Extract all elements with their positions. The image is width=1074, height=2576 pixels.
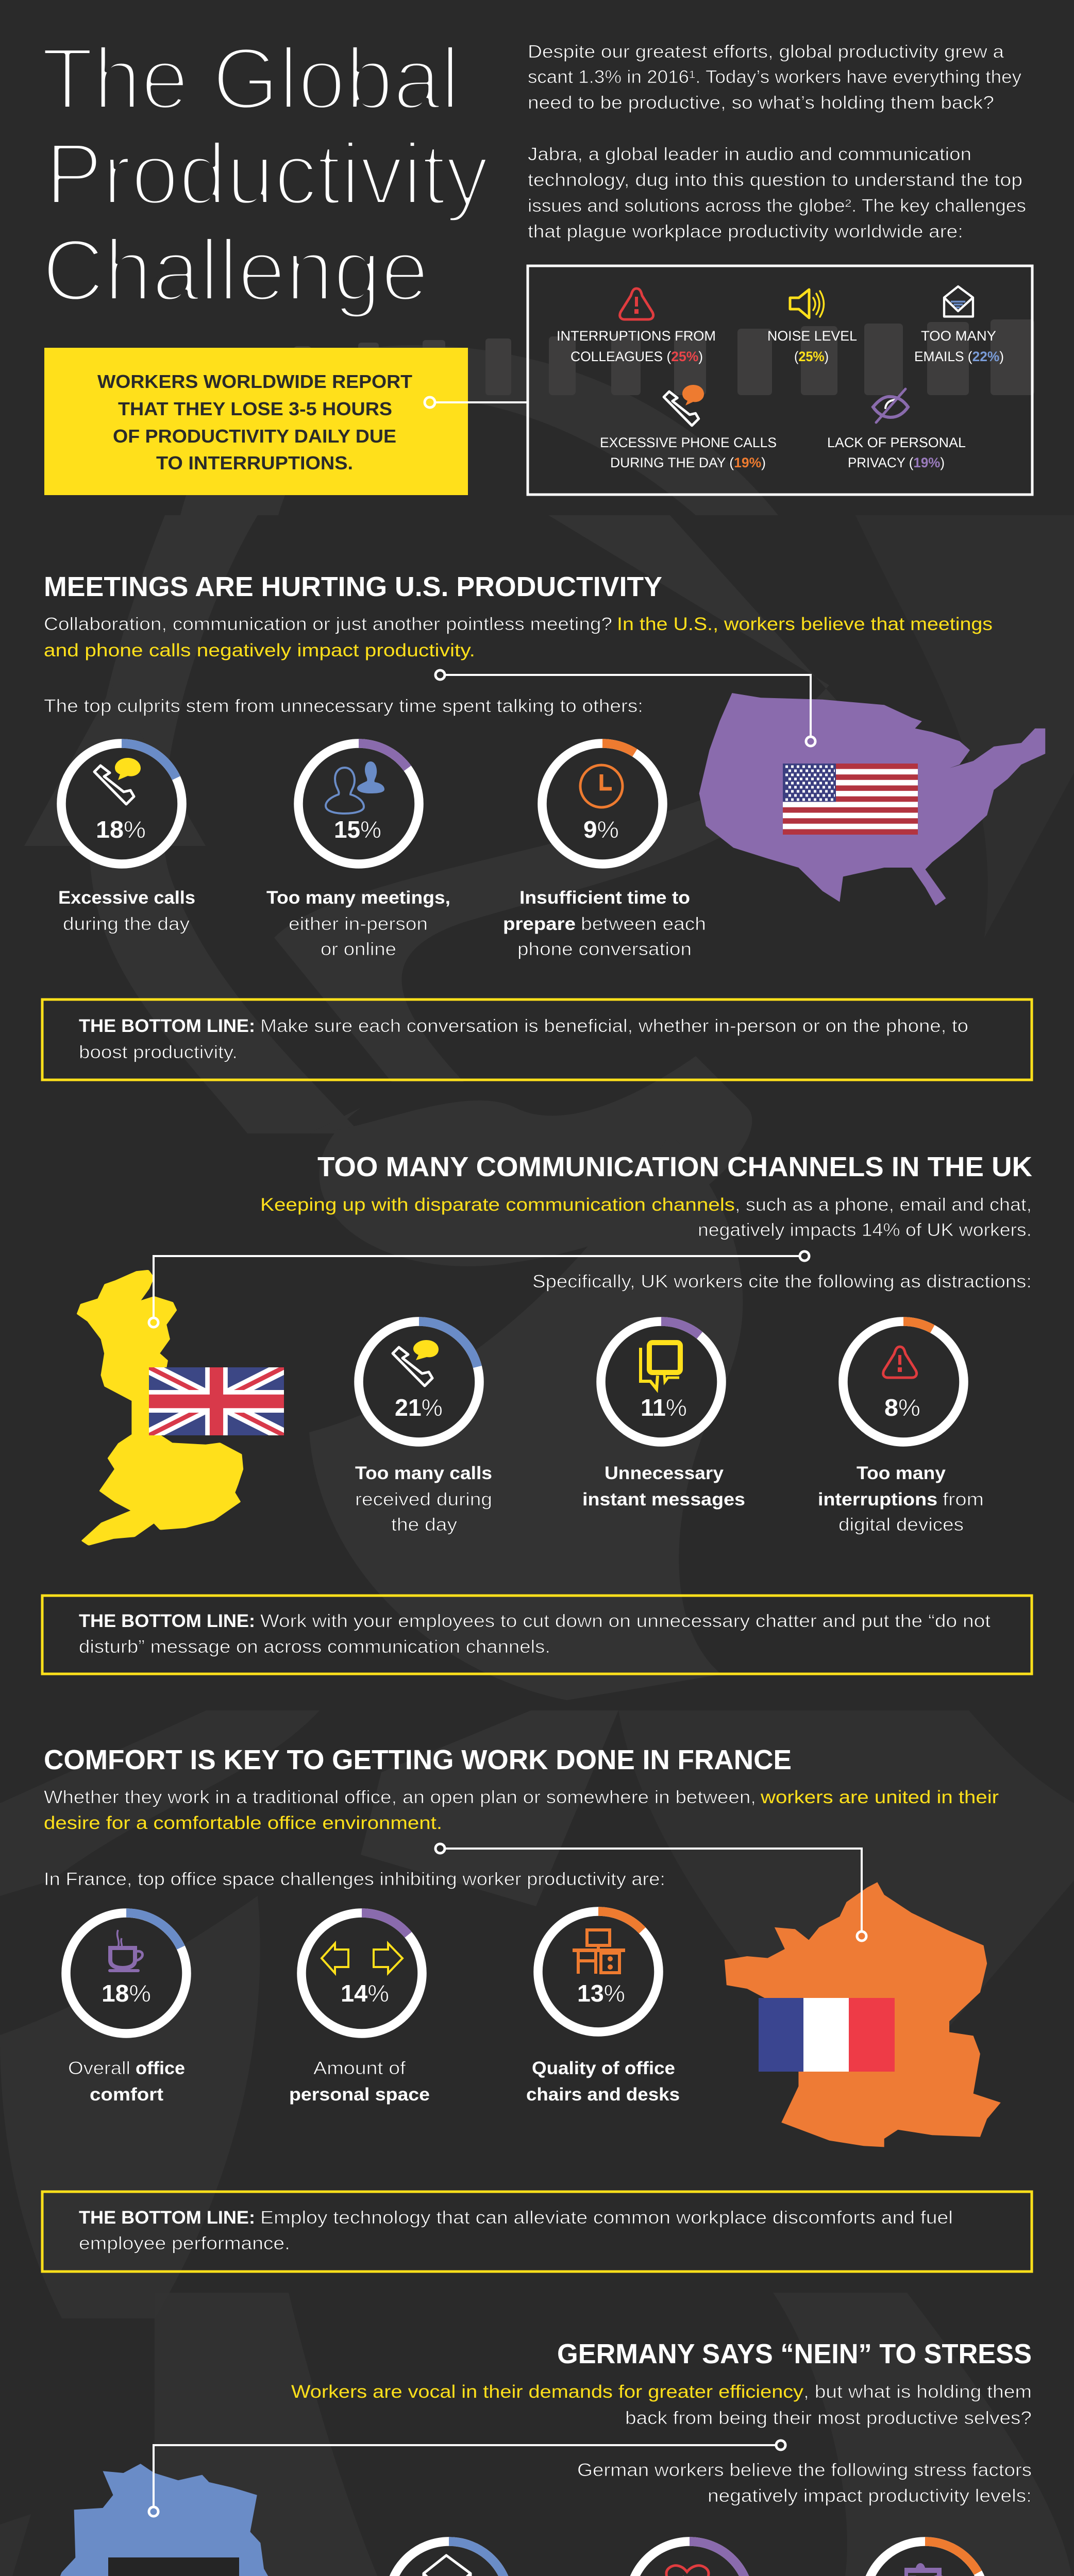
ring: insufficient time 9%: 9% bbox=[583, 816, 619, 843]
ring: excessive calls 18% bbox=[61, 743, 182, 864]
label: Too many bbox=[857, 1463, 946, 1483]
icon: people bbox=[326, 761, 384, 814]
icon: speaker bbox=[790, 290, 824, 318]
label: instant messages bbox=[582, 1489, 745, 1510]
label: digital devices bbox=[838, 1515, 964, 1535]
label: Unnecessary bbox=[605, 1463, 724, 1483]
intro text bbox=[44, 614, 993, 716]
intro text: In France, top office space challenges inhibiting worker productivity are: bbox=[44, 1869, 665, 1889]
intro text: Specifically, UK workers cite the following as distractions: bbox=[532, 1272, 1032, 1292]
callout: bottom line: Make sure each conversation is beneficial, whether in-person or on the phone, to bbox=[260, 1016, 968, 1036]
flag: UK bbox=[149, 1367, 284, 1435]
label: phone calls bbox=[600, 435, 777, 470]
map: UK bbox=[79, 1271, 241, 1544]
callout: bottom line: Employ technology that can alleviate common workplace discomforts and fuel bbox=[260, 2208, 953, 2228]
label: privacy: PRIVACY (19%) bbox=[848, 455, 945, 470]
callout: bottom line: disturb” message on across communication channels. bbox=[79, 1637, 550, 1657]
callout: lost hours: THAT THEY LOSE 3-5 HOURS bbox=[118, 398, 392, 419]
ring: personal space 14% bbox=[301, 1913, 422, 2033]
icon: eye slash bbox=[873, 389, 908, 422]
ring: chairs and desks 13%: 13% bbox=[577, 1980, 625, 2007]
label: privacy: LACK OF PERSONAL bbox=[827, 435, 966, 450]
intro text: Despite our greatest efforts, global productivity grew a bbox=[528, 42, 1004, 62]
label: Insufficient time to bbox=[519, 888, 690, 908]
connector: text to UK map bbox=[149, 1251, 809, 1327]
icon: email bbox=[424, 2555, 471, 2576]
section: France bbox=[42, 1744, 1032, 2272]
intro text: scant 1.3% in 2016¹. Today’s workers have everything they bbox=[528, 67, 1022, 87]
label: or online bbox=[321, 939, 396, 959]
intro text: that plague workplace productivity worldwide are: bbox=[528, 222, 963, 242]
icon: alert triangle bbox=[620, 289, 653, 319]
label bbox=[355, 1463, 492, 1535]
ring: excessive calls 18%: 18% bbox=[96, 816, 146, 843]
intro text: Whether they work in a traditional office, an open plan or somewhere in between, bbox=[44, 1787, 756, 1807]
label: noise: (25%) bbox=[794, 349, 829, 364]
intro text bbox=[44, 1787, 999, 1889]
connector: text to France map bbox=[435, 1844, 866, 1941]
intro text: issues and solutions across the globe². The key challenges bbox=[528, 196, 1026, 216]
label: Too many meetings, bbox=[266, 888, 450, 908]
label: interruptions: COLLEAGUES (25%) bbox=[570, 349, 703, 364]
ring: instant messages 11%: 11% bbox=[641, 1394, 687, 1421]
intro text: German workers believe the following stress factors bbox=[577, 2460, 1032, 2480]
ring: interruptions 8%: 8% bbox=[884, 1394, 920, 1421]
callout: bottom line: boost productivity. bbox=[79, 1042, 238, 1062]
label: emails: EMAILS (22%) bbox=[914, 349, 1004, 364]
icon: heart pulse bbox=[666, 2566, 709, 2576]
intro text bbox=[528, 42, 1026, 242]
flag: France bbox=[759, 1998, 895, 2072]
intro text: , but what is holding them bbox=[803, 2382, 1032, 2402]
callout: lost hours: TO INTERRUPTIONS. bbox=[156, 452, 353, 473]
label: Overall bbox=[68, 2058, 130, 2078]
icon: message bubbles bbox=[641, 1343, 680, 1389]
ring: flood of emails 26% bbox=[389, 2541, 509, 2576]
intro text: negatively impact productivity levels: bbox=[708, 2486, 1032, 2506]
label: Too many calls bbox=[355, 1463, 492, 1483]
ring: insufficient time 9% bbox=[542, 743, 663, 864]
callout: bottom line bbox=[42, 2192, 1032, 2272]
ring: too many meetings 15% bbox=[298, 743, 419, 864]
heading: TOO MANY COMMUNICATION CHANNELS IN THE UK bbox=[317, 1151, 1032, 1182]
label: interruptions: INTERRUPTIONS FROM bbox=[557, 328, 716, 344]
heading: GERMANY SAYS “NEIN” TO STRESS bbox=[557, 2338, 1032, 2369]
title bbox=[41, 30, 489, 319]
label: either in-person bbox=[289, 914, 428, 934]
label: from bbox=[943, 1489, 984, 1510]
icon: alert triangle bbox=[883, 1347, 917, 1378]
ring: quantitative goals 25% bbox=[629, 2541, 750, 2576]
map: Germany bbox=[54, 2464, 280, 2576]
label: privacy bbox=[827, 435, 966, 470]
label: interruptions bbox=[818, 1489, 937, 1510]
flag: USA bbox=[783, 764, 918, 835]
connector: text to USA map bbox=[435, 670, 815, 746]
label: emails bbox=[914, 328, 1004, 364]
label bbox=[818, 1463, 984, 1535]
label bbox=[582, 1463, 745, 1510]
intro text: back from being their most productive selves? bbox=[625, 2408, 1032, 2428]
callout: bottom line: employee performance. bbox=[79, 2233, 290, 2253]
flag: Germany bbox=[108, 2557, 239, 2576]
intro text: technology, dug into this question to understand the top bbox=[528, 170, 1022, 190]
label: during the day bbox=[63, 914, 190, 934]
ring: interruptions 8% bbox=[843, 1321, 964, 1442]
intro text: , such as a phone, email and chat, bbox=[735, 1195, 1032, 1215]
intro text: and phone calls negatively impact productivity. bbox=[44, 640, 475, 660]
icon: email bbox=[944, 286, 973, 316]
title: The Global bbox=[41, 30, 460, 128]
label bbox=[289, 2058, 430, 2105]
connector: text to Germany map bbox=[149, 2441, 785, 2516]
label: phone calls: EXCESSIVE PHONE CALLS bbox=[600, 435, 777, 450]
label: Amount of bbox=[313, 2058, 406, 2078]
title: Challenge bbox=[42, 222, 429, 319]
intro text: need to be productive, so what’s holding them back? bbox=[528, 93, 994, 113]
intro text: negatively impacts 14% of UK workers. bbox=[698, 1220, 1032, 1240]
label bbox=[266, 888, 450, 959]
icon: clipboard bbox=[904, 2563, 947, 2576]
label: phone calls: DURING THE DAY (19%) bbox=[610, 455, 766, 470]
callout: lost hours bbox=[44, 348, 468, 495]
intro text: desire for a comfortable office environment. bbox=[44, 1813, 442, 1833]
faint rising bars bbox=[294, 319, 1034, 395]
label bbox=[68, 2058, 185, 2105]
intro text: Keeping up with disparate communication channels bbox=[260, 1195, 735, 1215]
label: noise: NOISE LEVEL bbox=[767, 328, 857, 344]
label: emails: TOO MANY bbox=[921, 328, 996, 344]
ring: office comfort 18%: 18% bbox=[102, 1980, 151, 2007]
icon: phone with bubble bbox=[664, 385, 704, 426]
intro text: workers are united in their bbox=[760, 1787, 999, 1807]
heading: MEETINGS ARE HURTING U.S. PRODUCTIVITY bbox=[44, 571, 662, 602]
section: United Kingdom bbox=[42, 1151, 1032, 1674]
callout: bottom line: THE BOTTOM LINE: bbox=[79, 1016, 255, 1036]
label: Quality of office bbox=[532, 2058, 675, 2078]
section: Germany bbox=[42, 2338, 1032, 2576]
title: Productivity bbox=[45, 125, 489, 223]
label: between each bbox=[581, 914, 706, 934]
icon: desk bbox=[573, 1930, 625, 1974]
intro text: The top culprits stem from unnecessary time spent talking to others: bbox=[44, 696, 643, 716]
ring: too many meetings 15%: 15% bbox=[334, 816, 381, 843]
intro text: Jabra, a global leader in audio and communication bbox=[528, 144, 971, 164]
icon: phone bbox=[94, 758, 141, 804]
callout: lost hours: OF PRODUCTIVITY DAILY DUE bbox=[113, 426, 396, 447]
icon: coffee cup bbox=[108, 1930, 142, 1972]
section: United States bbox=[42, 571, 1045, 1080]
label: noise bbox=[767, 328, 857, 364]
ring: unclear tasks 17% bbox=[865, 2541, 985, 2576]
label bbox=[503, 888, 706, 959]
label: office bbox=[136, 2058, 185, 2078]
callout: bottom line: THE BOTTOM LINE: bbox=[79, 1611, 255, 1631]
label: received during bbox=[355, 1489, 492, 1510]
intro text: Workers are vocal in their demands for greater efficiency bbox=[291, 2382, 804, 2402]
callout: bottom line bbox=[42, 1596, 1032, 1674]
intro text bbox=[260, 1195, 1032, 1292]
label: prepare bbox=[503, 914, 576, 934]
label bbox=[526, 2058, 680, 2105]
icon: phone bbox=[393, 1340, 439, 1386]
ring: instant messages 11% bbox=[601, 1321, 721, 1442]
callout: bottom line: THE BOTTOM LINE: bbox=[79, 2208, 255, 2228]
icon: arrows bbox=[322, 1943, 402, 1973]
heading: COMFORT IS KEY TO GETTING WORK DONE IN FRANCE bbox=[44, 1744, 792, 1775]
ring: personal space 14%: 14% bbox=[341, 1980, 389, 2007]
map: France bbox=[725, 1882, 1001, 2147]
ring: too many calls 21%: 21% bbox=[395, 1394, 443, 1421]
label: interruptions bbox=[557, 328, 716, 364]
ring: office comfort 18% bbox=[66, 1913, 187, 2033]
map: USA bbox=[699, 693, 1045, 906]
panel: key challenges bbox=[528, 266, 1032, 495]
icon: clock bbox=[580, 765, 623, 807]
label: comfort bbox=[90, 2084, 163, 2105]
label: Excessive calls bbox=[58, 888, 195, 908]
label: chairs and desks bbox=[526, 2084, 680, 2105]
callout: bottom line bbox=[42, 999, 1032, 1080]
label: phone conversation bbox=[517, 939, 692, 959]
callout: lost hours: WORKERS WORLDWIDE REPORT bbox=[97, 371, 412, 392]
intro text: Collaboration, communication or just another pointless meeting? bbox=[44, 614, 612, 634]
intro text bbox=[291, 2382, 1032, 2506]
intro text: In the U.S., workers believe that meetings bbox=[617, 614, 993, 634]
label: personal space bbox=[289, 2084, 430, 2105]
callout: bottom line: Work with your employees to cut down on unnecessary chatter and put the “do not bbox=[260, 1611, 991, 1631]
ring: chairs and desks 13% bbox=[538, 1911, 659, 2032]
connector: callout to challenges box bbox=[430, 401, 528, 403]
ring: too many calls 21% bbox=[359, 1321, 479, 1442]
label bbox=[58, 888, 195, 934]
label: the day bbox=[391, 1515, 458, 1535]
